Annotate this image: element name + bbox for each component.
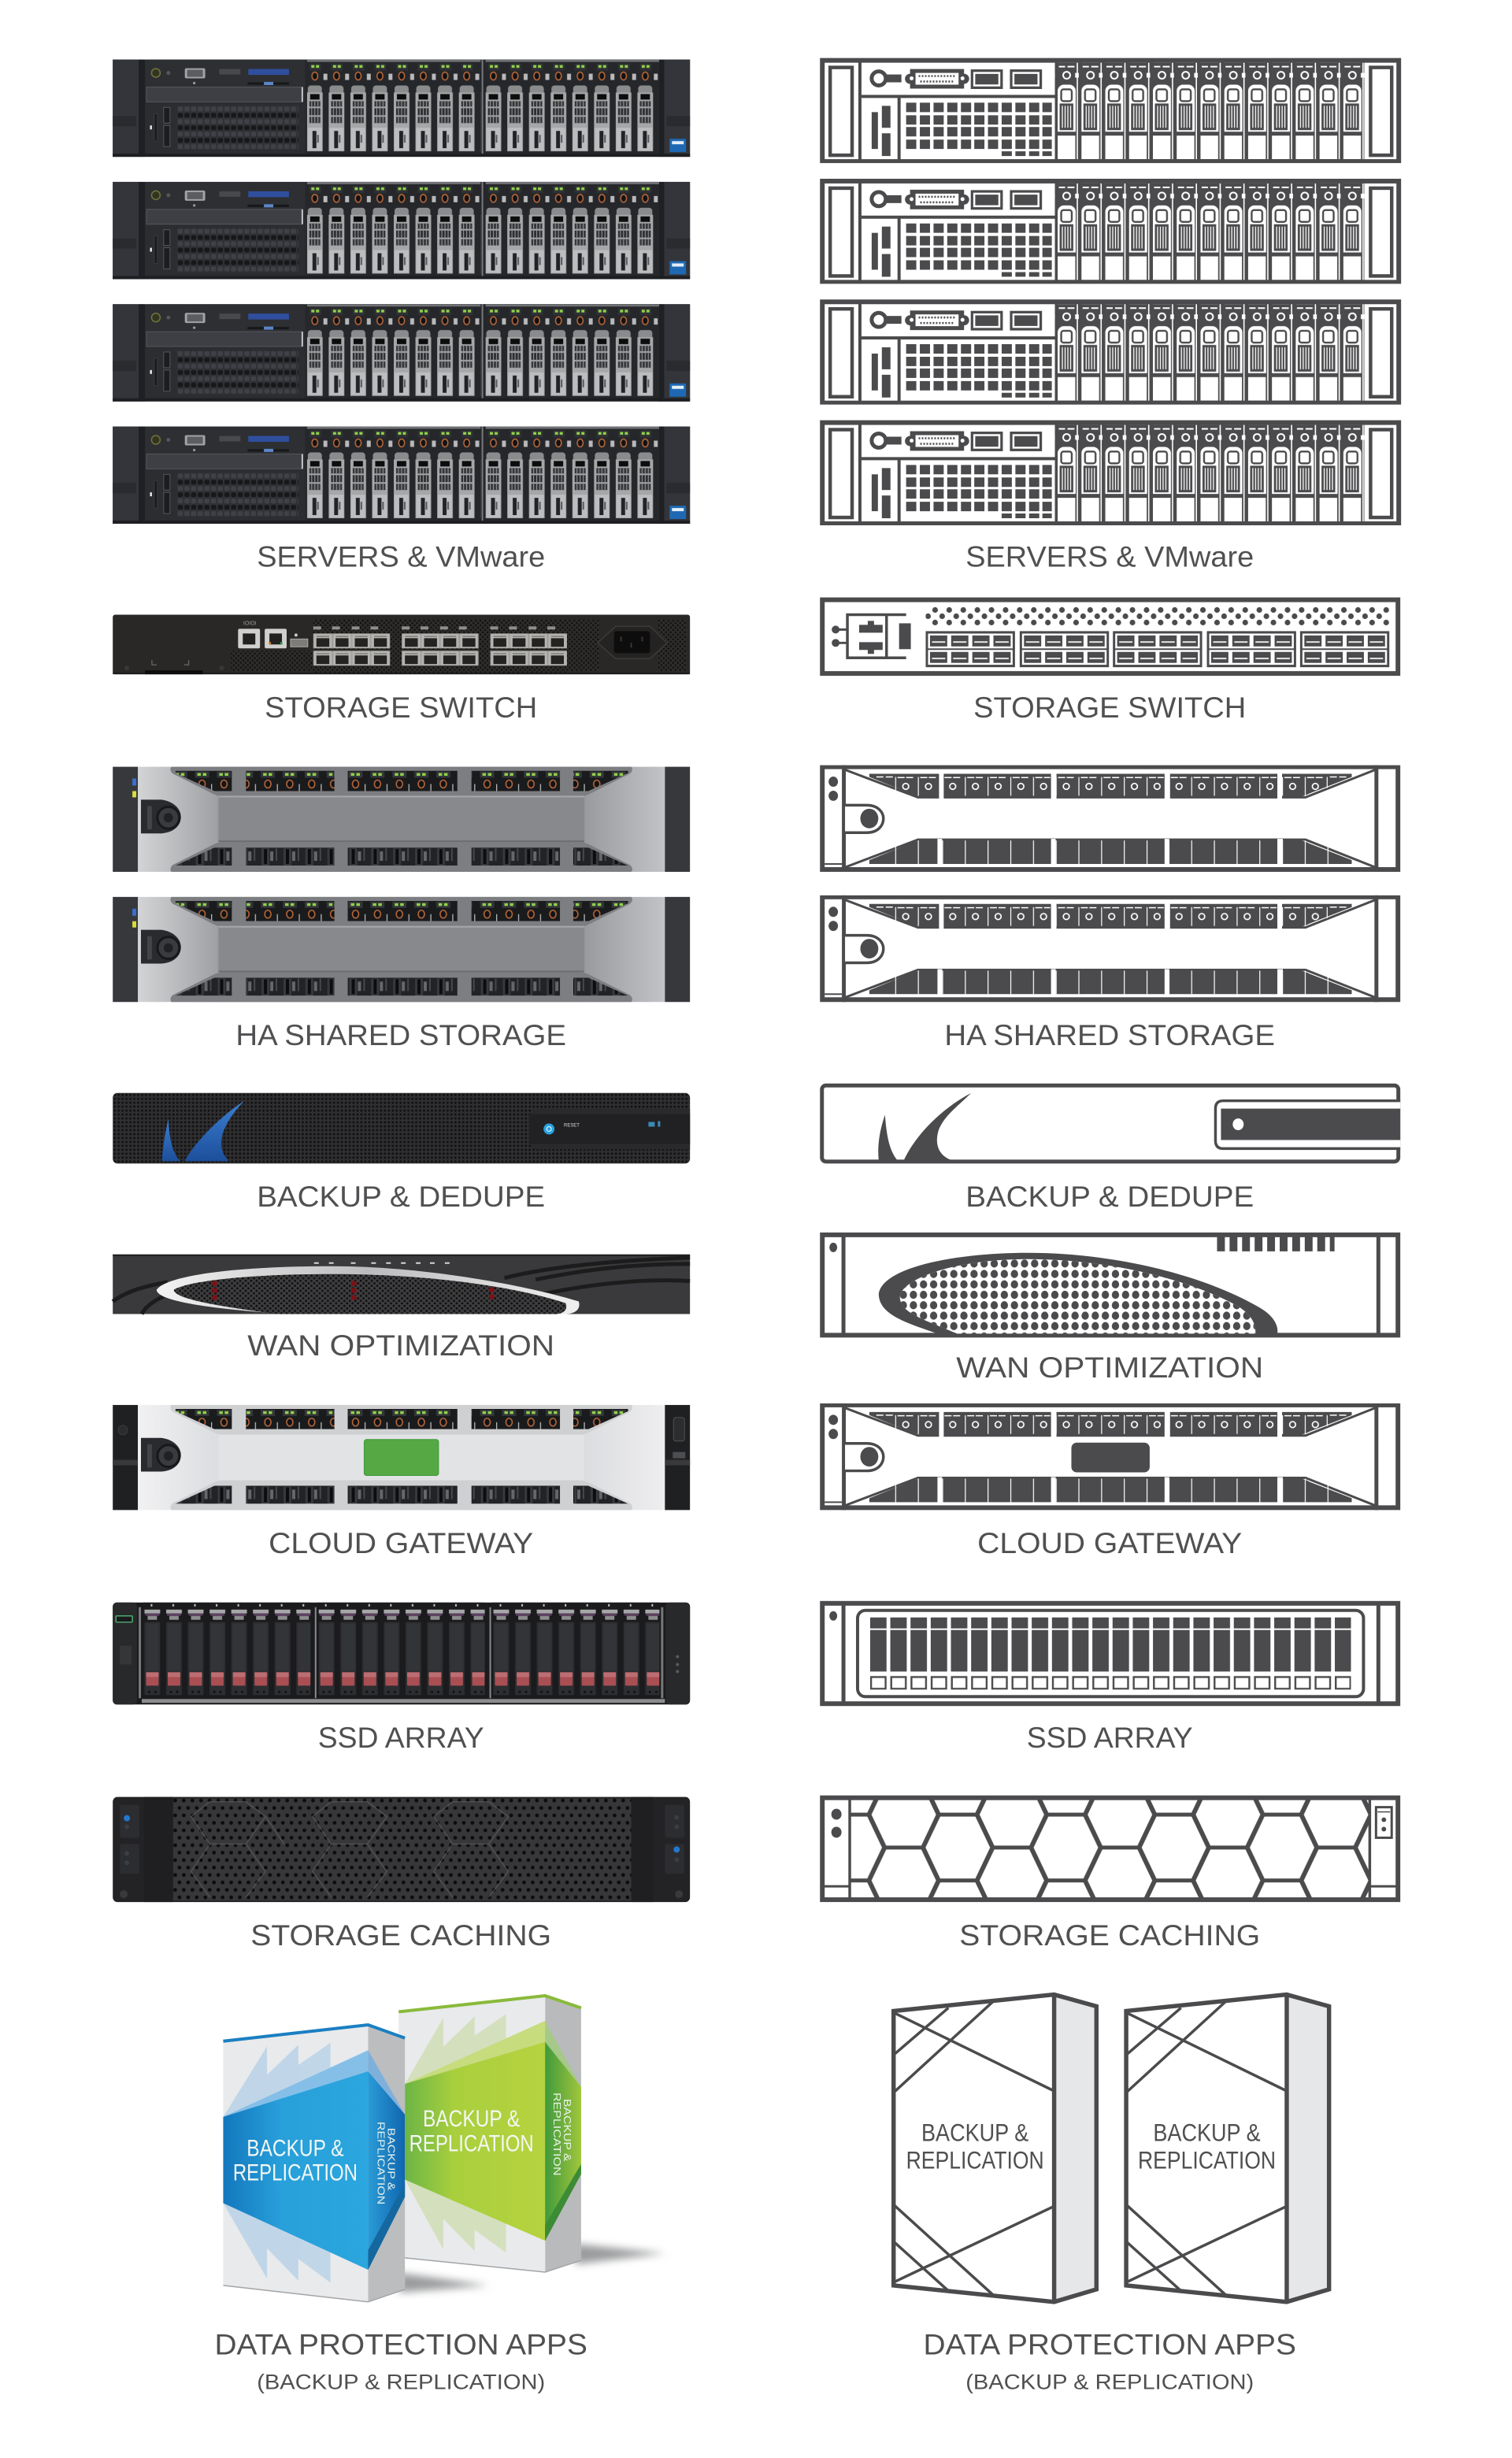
line box 2: BACKUP & bbox=[1153, 2119, 1261, 2147]
green box bbox=[398, 1996, 581, 2272]
label: data protection apps left: DATA PROTECTION APPS bbox=[214, 2328, 587, 2360]
label: storage switch left: STORAGE SWITCH bbox=[265, 691, 537, 724]
panel: backup and dedupe, colour bbox=[113, 1093, 690, 1163]
server unit 1 bbox=[113, 60, 690, 157]
line box 1 bbox=[894, 1995, 1096, 2302]
icon: shark fin logo bbox=[162, 1101, 244, 1161]
control panel bbox=[529, 1109, 690, 1149]
blue box bbox=[223, 2025, 405, 2302]
label: HA shared storage right: HA SHARED STORAGE bbox=[944, 1019, 1275, 1051]
panel: servers and VMware, colour version bbox=[113, 60, 690, 573]
panel: cloud gateway, colour bbox=[113, 1405, 690, 1510]
panel: SSD array, colour bbox=[113, 1603, 690, 1704]
line storage unit 1 bbox=[820, 766, 1400, 872]
panel: SSD array, line bbox=[822, 1603, 1398, 1704]
RJ45 ports bbox=[238, 621, 308, 648]
line server 4 bbox=[820, 421, 1401, 525]
vent bars bbox=[1217, 1236, 1335, 1251]
label: WAN optimization left: WAN OPTIMIZATION bbox=[247, 1329, 554, 1362]
storage unit 2 bbox=[113, 897, 690, 1002]
label: WAN optimization right: WAN OPTIMIZATION bbox=[956, 1351, 1263, 1384]
box text: blue front: REPLICATION bbox=[233, 2160, 358, 2186]
line storage unit 2 bbox=[820, 895, 1400, 1002]
box text: green front bbox=[410, 2106, 534, 2157]
box text: green side: BACKUP & bbox=[561, 2099, 573, 2162]
control panel bbox=[1215, 1101, 1400, 1148]
oval grille bbox=[157, 1266, 580, 1314]
status module bbox=[1376, 1807, 1392, 1837]
server unit 2 bbox=[113, 182, 690, 279]
storage unit 1 bbox=[113, 767, 690, 872]
label: cloud gateway right: CLOUD GATEWAY bbox=[977, 1527, 1242, 1559]
box text: blue side: REPLICATION bbox=[375, 2122, 387, 2204]
line server 3 bbox=[820, 299, 1401, 405]
box text: blue side: BACKUP & bbox=[385, 2128, 397, 2191]
port blocks bbox=[925, 631, 1389, 667]
drive bays bbox=[139, 1603, 663, 1698]
label: cloud gateway left: CLOUD GATEWAY bbox=[269, 1527, 533, 1559]
panel: servers and VMware, line version bbox=[820, 58, 1401, 573]
label: storage caching right: STORAGE CACHING bbox=[959, 1919, 1260, 1952]
label: data protection apps left: (BACKUP & REPLICATION) bbox=[257, 2370, 545, 2393]
label: storage caching left: STORAGE CACHING bbox=[250, 1919, 551, 1952]
icon: shark fin outline logo bbox=[878, 1093, 971, 1160]
line box 2 bbox=[1126, 1995, 1329, 2302]
panel: software boxes, colour bbox=[223, 1996, 665, 2302]
green status display bbox=[364, 1440, 439, 1476]
panel: HA shared storage, colour bbox=[113, 767, 690, 1051]
label: backup and dedupe left: BACKUP & DEDUPE bbox=[257, 1181, 545, 1213]
label: data protection apps right: DATA PROTECTION APPS bbox=[924, 2328, 1296, 2360]
box text: blue front bbox=[233, 2136, 358, 2186]
label: SSD array right: SSD ARRAY bbox=[1027, 1722, 1193, 1754]
label: data protection apps right: (BACKUP & REPLICATION) bbox=[965, 2370, 1254, 2393]
label: backup and dedupe right: BACKUP & DEDUPE bbox=[965, 1181, 1254, 1213]
box text: green front: REPLICATION bbox=[410, 2131, 534, 2157]
floor shadows bbox=[399, 2244, 665, 2293]
panel: HA shared storage, line bbox=[820, 766, 1400, 1051]
switch interface icon bbox=[832, 614, 911, 658]
line server 1 bbox=[820, 58, 1401, 163]
right handle bbox=[665, 1805, 684, 1898]
box text: green side: REPLICATION bbox=[551, 2093, 563, 2176]
panel: storage caching, colour bbox=[113, 1797, 690, 1902]
drive bay enclosure bbox=[858, 1611, 1363, 1696]
left handle bbox=[120, 1805, 139, 1898]
line box 1: REPLICATION bbox=[906, 2146, 1044, 2174]
label: servers right: SERVERS & VMware bbox=[965, 541, 1254, 573]
display bbox=[1071, 1443, 1150, 1473]
panel: software boxes, line bbox=[894, 1995, 1329, 2302]
panel: cloud gateway, line bbox=[820, 1403, 1400, 1510]
line box 2: REPLICATION bbox=[1138, 2146, 1276, 2174]
line server 2 bbox=[820, 179, 1401, 284]
box text: green front: BACKUP & bbox=[423, 2106, 520, 2132]
label: HA shared storage left: HA SHARED STORAGE bbox=[235, 1019, 566, 1051]
label: servers left: SERVERS & VMware bbox=[257, 541, 545, 573]
server unit 3 bbox=[113, 304, 690, 402]
server unit 4 bbox=[113, 427, 690, 524]
panel: storage switch, line bbox=[822, 600, 1398, 673]
panel: storage switch, colour bbox=[113, 614, 690, 674]
panel: storage caching, line bbox=[822, 1798, 1398, 1900]
line box 1: BACKUP & bbox=[921, 2119, 1028, 2147]
control panel: RESET bbox=[564, 1124, 580, 1129]
label: storage switch right: STORAGE SWITCH bbox=[973, 691, 1246, 724]
label: SSD array left: SSD ARRAY bbox=[318, 1722, 484, 1754]
label: data protection apps left bbox=[214, 2328, 587, 2393]
label: data protection apps right bbox=[924, 2328, 1296, 2393]
panel: WAN optimization, line bbox=[822, 1235, 1398, 1335]
RJ45 ports: IOIOI bbox=[243, 621, 257, 626]
oval dot grille bbox=[879, 1253, 1277, 1333]
power socket bbox=[598, 626, 667, 658]
box text: blue side bbox=[375, 2122, 397, 2204]
box text: green side bbox=[551, 2093, 573, 2176]
fibre port blocks bbox=[313, 628, 567, 665]
box text: blue front: BACKUP & bbox=[246, 2136, 344, 2162]
panel: backup and dedupe, line bbox=[822, 1085, 1400, 1162]
panel: WAN optimization, colour bbox=[113, 1255, 690, 1314]
